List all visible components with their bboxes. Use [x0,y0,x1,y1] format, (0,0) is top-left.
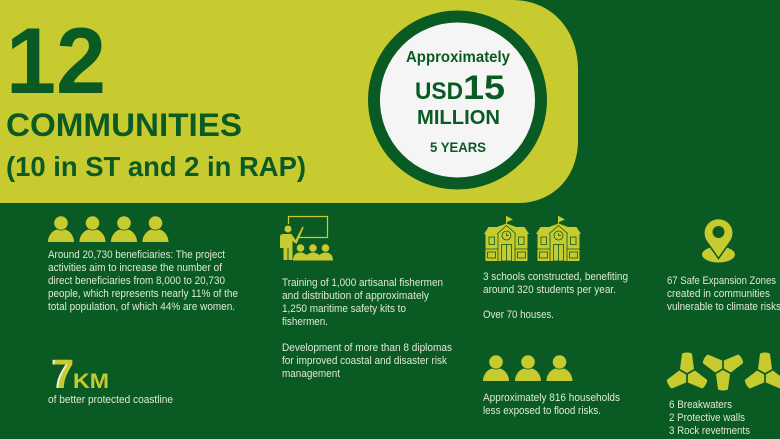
km unit: KM [73,370,109,393]
text: training [282,277,453,380]
text: beneficiaries: people, which represents nearly 11% of the [48,288,238,300]
approximately: Approximately [406,49,510,66]
5 years: 5 YEARS [430,139,486,155]
budget circle [374,16,541,184]
text: beneficiaries: direct beneficiaries from 8,000 to 20,730 [48,275,225,287]
stat: 7 km [51,351,109,397]
icon: four people [48,216,168,242]
text: safe expansion zones [667,275,780,313]
circle ring [374,16,541,184]
text: training: 1,250 maritime safety kits to [282,303,406,315]
text: coastal works: 6 Breakwaters [669,399,733,411]
text: households: Approximately 816 households [483,392,621,404]
text: training: Development of more than 8 diplomas [282,342,453,354]
icon: schools [484,216,581,261]
text: households [483,392,621,417]
text: training: management [282,368,340,380]
icon: location pin [702,218,735,262]
communities breakdown: (10 in ST and 2 in RAP) [6,151,306,182]
number 7: 7 [53,351,74,397]
text: beneficiaries: total population, of which 44% are women. [48,301,235,313]
text: training: Training of 1,000 artisanal fishermen [282,277,443,289]
text: coastline: of better protected coastline [48,394,173,406]
number 7: 7 [51,351,72,397]
15: 15 [463,69,505,107]
icon: three people [483,355,572,381]
heading: 12 communities [6,8,306,182]
text: beneficiaries: Around 20,730 beneficiaries: The project [48,249,225,261]
million: MILLION [417,107,500,129]
USD: USD [415,78,463,105]
big number 12: 12 [6,8,106,113]
text: schools: around 320 students per year. [483,284,616,296]
text: schools: Over 70 houses. [483,309,554,321]
board [288,216,328,238]
teacher [280,226,304,260]
text: coastal works [669,399,751,437]
panel: top banner [0,0,578,203]
text: safe expansion zones: created in communities [667,288,771,300]
text: coastal works: 2 Protective walls [669,412,746,424]
communities label: COMMUNITIES [6,107,242,143]
text: beneficiaries [48,249,238,313]
text: training: fishermen. [282,316,328,328]
text: coastal works: 3 Rock revetments [669,425,751,437]
text: training: for improved coastal and disaster risk [282,355,448,367]
text: households: less exposed to flood risks. [483,405,601,417]
text: schools [483,271,628,321]
text: schools: 3 schools constructed, benefiting [483,271,628,283]
icon: tetrapods [665,339,780,397]
text: beneficiaries: activities aim to increase the number of [48,262,223,274]
pupils [293,244,333,260]
text: training: and distribution of approximately [282,290,430,302]
icon: teacher with class [280,216,333,260]
